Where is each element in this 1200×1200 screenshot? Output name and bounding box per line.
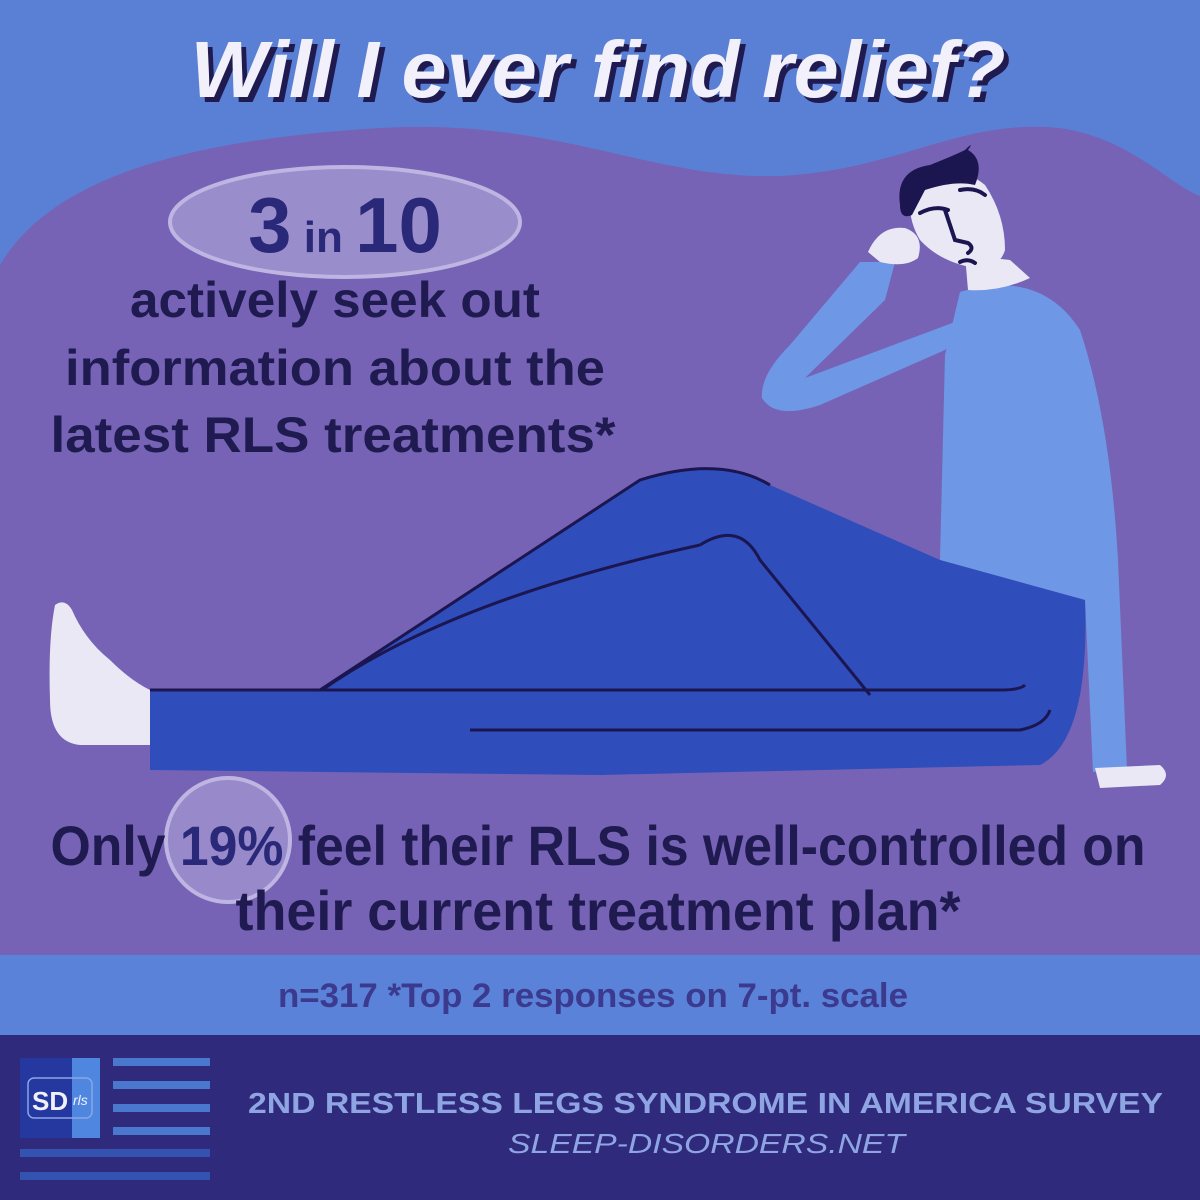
face [910, 172, 1005, 268]
text: seek information: information about the [65, 340, 605, 396]
stat: 19% well-controlled: their current treatment plan* [236, 879, 961, 942]
text: seek information: actively seek out [130, 272, 540, 328]
stat: 19% well-controlled: Only 19% feel their RLS is well-controlled on [50, 814, 1146, 877]
text: seek information: latest RLS treatments* [50, 407, 616, 463]
neck [965, 255, 1030, 290]
logo: SD [32, 1086, 68, 1116]
pants [150, 469, 1085, 775]
footer url: SLEEP-DISORDERS.NET [508, 1128, 907, 1159]
text: seek information [50, 272, 616, 463]
footnote band: n=317 *Top 2 responses on 7-pt. scale [278, 977, 908, 1015]
logo [20, 1058, 100, 1138]
stat: 3 in 10 [170, 167, 520, 277]
stat: 19% well-controlled [50, 778, 1146, 942]
footer title: 2ND RESTLESS LEGS SYNDROME IN AMERICA SURVEY [248, 1088, 1163, 1120]
title: Will I ever find relief? [196, 30, 1010, 119]
raised arm [762, 262, 1000, 411]
hair [899, 145, 979, 216]
left foot [50, 602, 150, 745]
footer [0, 1035, 1200, 1200]
pants outlines [150, 469, 1050, 730]
stat: 3 in 10: 3 in 10 [248, 181, 442, 269]
hand [868, 228, 920, 264]
logo: rls [73, 1092, 88, 1108]
right hand [1095, 765, 1166, 788]
sweater body [940, 285, 1127, 772]
title: Will I ever find relief? [190, 25, 1006, 114]
face features [920, 189, 985, 263]
illustration: sitting man [50, 145, 1166, 788]
purple panel [0, 127, 1200, 955]
footnote band [0, 955, 1200, 1035]
